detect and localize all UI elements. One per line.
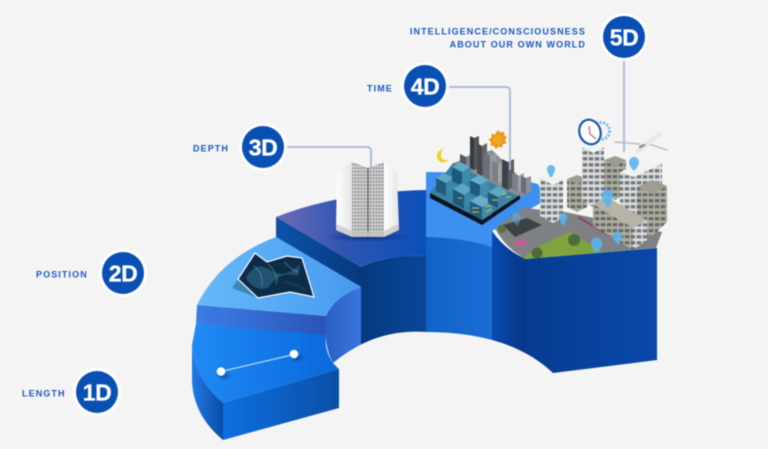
label: 5D intelligence: INTELLIGENCE/CONSCIOUSNESS — [410, 26, 586, 36]
label: 4D time — [367, 62, 449, 110]
park — [523, 232, 602, 259]
label: 1D length: LENGTH — [22, 388, 66, 398]
label: 3D depth: DEPTH — [193, 144, 229, 154]
3D building icon — [323, 162, 411, 242]
segment 2D: base — [196, 237, 361, 363]
1D line icon — [216, 350, 305, 381]
olive left building — [567, 175, 587, 212]
ground — [495, 208, 662, 259]
label: 2D position: POSITION — [36, 270, 88, 280]
5D city — [495, 142, 667, 259]
yellow window lights — [458, 194, 511, 212]
location pins — [512, 157, 639, 253]
label: 2D position: 2D — [109, 260, 137, 286]
platform — [430, 163, 520, 224]
clock icon — [576, 117, 604, 147]
4D city icon — [430, 136, 533, 225]
airplane icon — [615, 134, 667, 151]
central tower — [582, 142, 604, 207]
label: 1D length — [22, 368, 121, 416]
label: 5D intelligence — [410, 13, 648, 61]
gray skyline — [453, 136, 533, 199]
olive rear building — [604, 156, 626, 200]
segment 4D: base — [426, 172, 546, 345]
segment 3D: base — [276, 190, 426, 345]
pink plaza — [513, 240, 528, 247]
label: 3D depth — [193, 123, 287, 171]
2D map icon — [232, 253, 314, 298]
label: 4D time: 4D — [411, 74, 439, 100]
moon icon — [437, 148, 449, 162]
blue blocks — [436, 162, 508, 220]
olive right building — [637, 180, 667, 236]
label: 4D time: TIME — [367, 84, 393, 94]
label: 3D depth: 3D — [249, 134, 277, 160]
sun icon — [488, 130, 507, 149]
low long building — [593, 197, 647, 250]
central hole — [333, 332, 560, 449]
gear icon — [592, 122, 610, 140]
road car — [578, 217, 608, 235]
tall left building — [540, 174, 563, 223]
label: 5D intelligence: ABOUT OUR OWN WORLD — [450, 40, 586, 50]
connector lines — [122, 60, 624, 391]
segment 1D: base — [192, 324, 339, 440]
label: 1D length: 1D — [83, 380, 111, 406]
white right building — [620, 159, 662, 232]
label: 5D intelligence: 5D — [610, 24, 638, 50]
label: 2D position — [36, 249, 147, 297]
segment 5D: base — [492, 231, 657, 380]
